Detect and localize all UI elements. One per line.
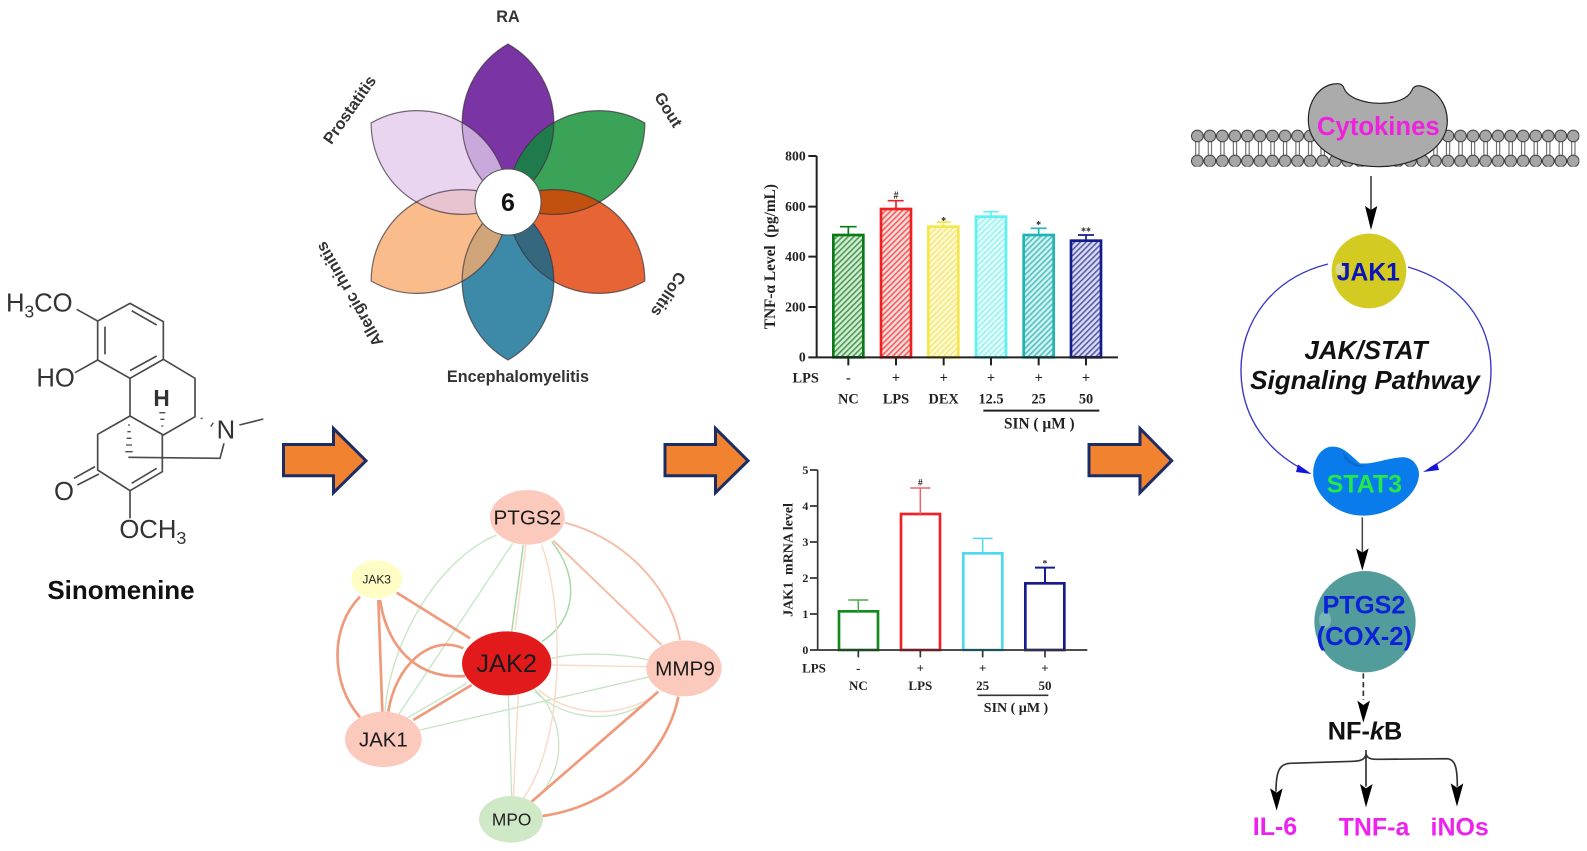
cytokine outputs: iNOs (1431, 814, 1489, 842)
node: PTGS2 (490, 490, 565, 545)
group labels: + (1082, 370, 1090, 386)
arrow: targets to validation (665, 428, 748, 493)
cytokine receptor: Cytokines (1317, 113, 1440, 141)
molecule bonds (74, 303, 263, 518)
axis tick labels: 600 (785, 199, 806, 214)
cytokine outputs (1253, 813, 1489, 842)
atom labels: O (54, 478, 74, 506)
bar chart: JAK1 mRNA level (782, 463, 1087, 716)
axis tick labels: 3 (802, 535, 808, 549)
center count (475, 169, 541, 235)
network edges (337, 523, 680, 816)
group labels: LPS (793, 370, 819, 386)
arrow: validation to mechanism (1089, 428, 1172, 493)
group labels (793, 370, 1093, 433)
axes (810, 470, 1087, 695)
node: STAT3: STAT3 (1327, 471, 1402, 499)
panel: sinomenine structure (6, 290, 263, 605)
branching arrows (1270, 750, 1463, 811)
axis title: JAK1 mRNA level (782, 503, 797, 617)
node: MPO (479, 796, 543, 843)
atom labels: OCH (119, 516, 176, 544)
atom labels: H (6, 290, 25, 318)
group labels: 25 (1031, 391, 1046, 407)
group labels: LPS (908, 678, 932, 693)
label: NF-kB: NF-kB (1328, 717, 1402, 745)
significance marks: ** (1081, 227, 1091, 238)
bars (833, 209, 1101, 357)
atom labels: N (217, 417, 235, 445)
axis tick labels: 0 (799, 350, 806, 365)
bars (839, 514, 1064, 650)
node: MMP9 (646, 640, 722, 696)
group labels: NC (849, 678, 868, 693)
node: JAK1 (345, 712, 422, 767)
group labels: + (917, 660, 924, 675)
arrow: JAK1 loop to STAT3 left (1241, 264, 1328, 474)
group labels: SIN ( µM ) (1004, 416, 1075, 433)
node: STAT3 (1313, 447, 1419, 516)
lipid bilayer (1191, 129, 1579, 168)
petal labels: Gout (650, 89, 686, 131)
axis tick labels: 4 (802, 499, 808, 513)
atom labels: 3 (25, 302, 34, 322)
petal labels: RA (496, 8, 520, 26)
axis tick labels: 200 (785, 299, 806, 314)
significance marks (918, 478, 1048, 570)
group labels: LPS (802, 660, 826, 675)
axis tick labels: 800 (785, 149, 806, 164)
petal labels (313, 8, 689, 386)
group labels: + (892, 370, 900, 386)
axis tick labels: 400 (785, 249, 806, 264)
axis title: TNF-α Level (pg/mL) (762, 184, 779, 329)
node: JAK3: JAK3 (362, 573, 391, 587)
cytokine outputs: IL-6 (1253, 813, 1297, 841)
node: JAK3 (351, 560, 402, 598)
petal labels: Colitis (647, 268, 689, 320)
node: JAK1 (1332, 234, 1406, 308)
group labels: + (979, 660, 986, 675)
node: MPO: MPO (492, 810, 531, 830)
group labels: + (1041, 660, 1049, 675)
pathway title: JAK/STAT (1304, 335, 1428, 365)
group labels: NC (838, 391, 859, 407)
center count: 6 (501, 189, 515, 217)
bar chart: TNF-alpha level (762, 149, 1118, 433)
atom labels: 3 (176, 528, 186, 548)
arrow: JAK1 loop to STAT3 right (1408, 267, 1491, 472)
significance marks: * (941, 216, 946, 227)
group labels: 12.5 (978, 391, 1004, 407)
node: PTGS2 COX-2 (1314, 571, 1416, 672)
significance marks (893, 191, 1091, 238)
group labels: + (987, 370, 995, 386)
axis tick labels: 2 (802, 571, 808, 585)
error bars (848, 488, 1055, 611)
group labels: 50 (1039, 678, 1051, 693)
group labels: - (856, 660, 860, 675)
panel: signaling pathway (1191, 84, 1579, 842)
significance marks: # (893, 191, 898, 202)
node: JAK2 (462, 631, 551, 695)
petal labels: Prostatitis (320, 72, 380, 148)
node: JAK2: JAK2 (476, 650, 537, 678)
arrow: cytokines to JAK1 (1365, 176, 1377, 230)
group labels: SIN ( µM ) (984, 701, 1049, 716)
cytokine outputs: TNF-a (1339, 814, 1410, 842)
atom labels (6, 290, 235, 548)
error bars (840, 201, 1094, 241)
compound name: Sinomenine (47, 575, 195, 605)
node: JAK1: JAK1 (359, 730, 408, 752)
axis tick labels: 0 (802, 643, 808, 657)
panel: disease flower diagram (313, 8, 689, 386)
group labels: LPS (883, 391, 909, 407)
significance marks: * (1043, 560, 1048, 570)
group labels: - (846, 370, 851, 386)
cell membrane and cytokines (1191, 84, 1579, 308)
panel: protein interaction network (337, 490, 722, 843)
group labels: DEX (929, 391, 959, 407)
cytokine receptor (1308, 84, 1447, 167)
arrow: STAT3 to PTGS2 (1356, 517, 1369, 571)
axis tick labels (802, 463, 808, 657)
axes (808, 156, 1118, 411)
significance marks: # (918, 478, 923, 488)
pathway title: Signaling Pathway (1250, 365, 1481, 395)
petal labels: Allergic rhinitis (313, 238, 387, 350)
group labels: 25 (976, 678, 990, 693)
atom labels: HO (36, 365, 75, 393)
arrow: sinomenine to targets (284, 428, 366, 493)
group labels: + (1035, 370, 1043, 386)
axis tick labels: 5 (802, 463, 808, 477)
petal labels: Encephalomyelitis (447, 368, 589, 386)
axis tick labels (785, 149, 806, 365)
group labels: + (940, 370, 948, 386)
significance marks: * (1036, 220, 1041, 231)
group labels: 50 (1079, 391, 1093, 407)
node: MMP9: MMP9 (655, 657, 715, 680)
flower petals (370, 43, 646, 361)
group labels (802, 660, 1051, 716)
atom labels: H (153, 385, 170, 411)
axis tick labels: 1 (802, 607, 808, 621)
arrow: PTGS2 to NF-kB (1357, 673, 1370, 723)
node: PTGS2 COX-2: PTGS2 (1322, 591, 1406, 619)
atom labels: CO (34, 290, 73, 318)
node: JAK1: JAK1 (1337, 260, 1400, 287)
node: PTGS2 COX-2: (COX-2) (1317, 623, 1412, 651)
node: PTGS2: PTGS2 (493, 506, 561, 529)
